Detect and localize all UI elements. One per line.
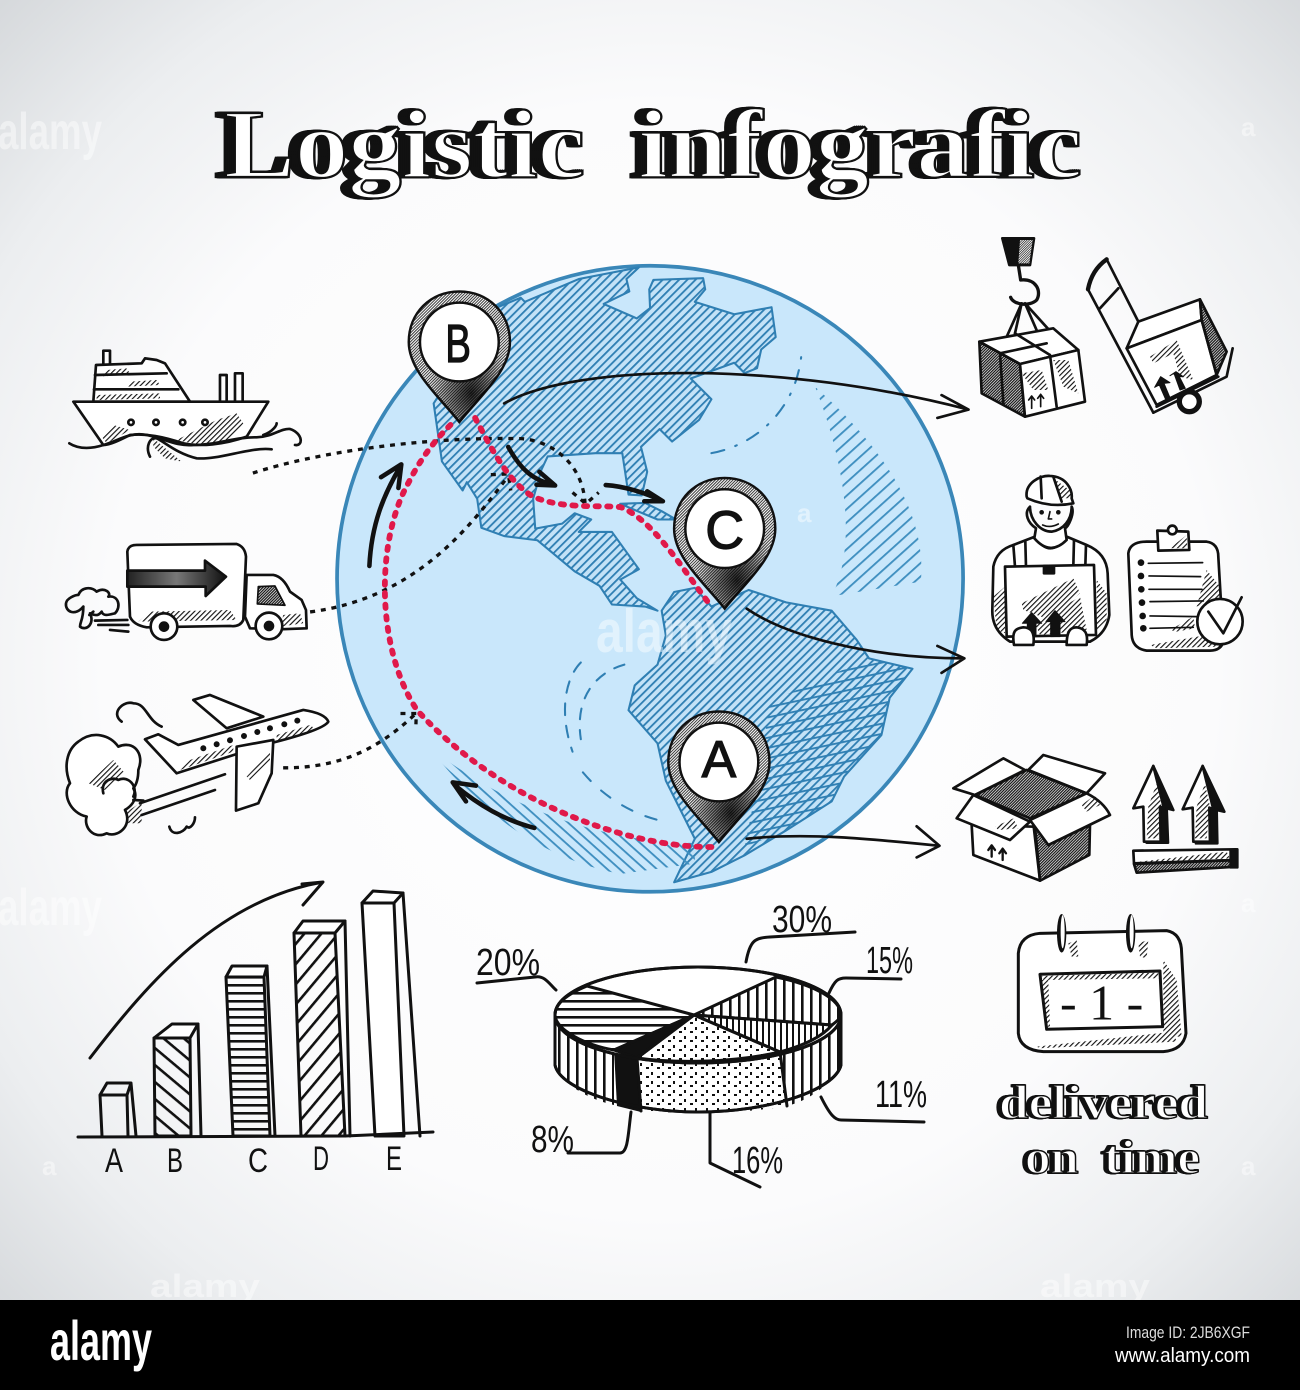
watermarks: alamy [596, 598, 732, 665]
icon: clipboard with check [1128, 526, 1243, 651]
panel: globe with route map [253, 266, 968, 892]
pin C: C [705, 501, 744, 561]
panel: pie chart [476, 899, 927, 1187]
red delivery route [385, 418, 711, 847]
footer bar [0, 1300, 1300, 1390]
delivered on time caption [999, 1076, 1208, 1184]
delivered on time caption: on time [1025, 1131, 1200, 1184]
continents [434, 267, 913, 882]
panel: bar chart [78, 882, 433, 1180]
watermarks: a [1241, 1151, 1256, 1181]
icon: ship [69, 351, 301, 462]
direction arrows [369, 447, 663, 828]
icon: worker holding box [992, 476, 1109, 645]
icon: open cardboard box [953, 755, 1110, 881]
pie value labels: 15% [866, 940, 913, 982]
pie value labels [476, 899, 927, 1182]
watermarks: a [797, 498, 812, 528]
bar D [294, 921, 350, 1136]
watermarks: alamy [0, 879, 102, 937]
bar A [100, 1083, 136, 1136]
footer logo: alamy [50, 1309, 152, 1372]
bar B [154, 1024, 201, 1136]
watermarks: a [1241, 888, 1256, 918]
globe disc [337, 266, 963, 892]
bar C [226, 966, 275, 1136]
title: Logistic infografic [224, 91, 1082, 199]
pie side [555, 1015, 841, 1113]
growth arrow [90, 882, 323, 1058]
delivery arrows to services [504, 373, 968, 857]
pin A [668, 711, 769, 842]
watermarks: alamy [1040, 1268, 1150, 1304]
pie value labels: 16% [732, 1140, 783, 1182]
calendar date: - 1 - [1060, 974, 1143, 1030]
watermarks: alamy [150, 1268, 260, 1304]
chart axis [78, 1132, 433, 1137]
pin B: B [445, 314, 471, 374]
pin B [409, 291, 510, 422]
axis labels: A [105, 1142, 123, 1180]
icon: calendar [1018, 914, 1186, 1052]
axis labels [105, 1140, 402, 1180]
icon: hand trolley with box [1088, 259, 1233, 413]
watermarks: a [42, 1151, 57, 1181]
pie value labels: 20% [476, 942, 540, 984]
axis labels: B [167, 1142, 183, 1180]
watermarks: alamy [0, 103, 102, 161]
ocean dashed currents [565, 350, 802, 822]
pin A: A [702, 730, 737, 788]
axis labels: C [248, 1142, 268, 1180]
black dashed feeder routes [253, 438, 599, 768]
axis labels: D [313, 1140, 329, 1178]
icon: delivery truck [66, 544, 307, 640]
pin C [674, 478, 775, 609]
watermarks: a [1241, 112, 1256, 142]
bar E [362, 891, 420, 1136]
pie value labels: 30% [772, 899, 832, 941]
pie value labels: 8% [531, 1119, 574, 1161]
icon: crane hook with crate [979, 238, 1085, 417]
delivered on time caption: delivered [999, 1076, 1208, 1129]
image id: Image ID: 2JB6XGF [1126, 1323, 1250, 1342]
icon: this side up arrows [1133, 766, 1237, 873]
axis labels: E [386, 1140, 402, 1178]
pie value labels: 11% [875, 1074, 927, 1116]
globe shading [430, 387, 921, 874]
pie top slices [555, 967, 841, 1063]
website: www.alamy.com [1114, 1345, 1250, 1367]
pie leader lines [477, 932, 924, 1187]
icon: airplane [67, 695, 328, 835]
